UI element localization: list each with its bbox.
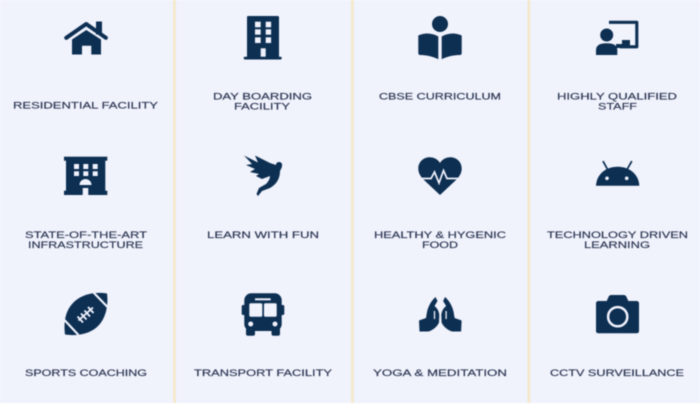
label: cbse curriculum: CBSE CURRICULUM — [379, 90, 501, 102]
label: technology driven learning: TECHNOLOGY DRIVEN — [547, 229, 688, 240]
panel: day boarding facility — [213, 16, 312, 112]
icon: house — [66, 22, 106, 54]
icon: american football — [64, 292, 108, 335]
panel: day boarding facility: FACILITY — [234, 100, 291, 112]
icon: praying hands — [419, 297, 462, 332]
panel: healthy and hygenic food — [374, 157, 506, 250]
label: day boarding facility: DAY BOARDING — [213, 90, 312, 102]
panel: highly qualified staff: STAFF — [598, 100, 637, 112]
icon: camera — [596, 295, 639, 333]
panel: transport facility — [194, 293, 333, 378]
label: cctv surveillance: CCTV SURVEILLANCE — [550, 367, 684, 378]
panel: state-of-the-art infrastructure — [25, 157, 147, 250]
panel: state-of-the-art infrastructure: INFRASTRUCTURE — [28, 239, 143, 250]
panel: learn with fun — [207, 156, 319, 240]
label: sports coaching: SPORTS COACHING — [25, 367, 147, 378]
icon: heart with pulse — [418, 157, 462, 195]
icon: reader with open book — [418, 16, 462, 59]
panel: highly qualified staff — [557, 22, 677, 111]
icon: large building — [64, 157, 107, 195]
icon: winged figure — [244, 156, 282, 196]
panel: technology driven learning — [547, 162, 688, 250]
label: state-of-the-art infrastructure: STATE-OF-THE-ART — [25, 229, 147, 240]
panel: technology driven learning: LEARNING — [584, 239, 650, 250]
panel: cbse curriculum — [379, 16, 501, 102]
label: learn with fun: LEARN WITH FUN — [207, 229, 319, 240]
panel: cctv surveillance — [550, 295, 684, 378]
label: transport facility: TRANSPORT FACILITY — [194, 367, 333, 378]
label: highly qualified staff: HIGHLY QUALIFIED — [557, 90, 677, 102]
icon: building — [244, 16, 282, 60]
panel: residential facility — [13, 22, 159, 110]
panel: healthy and hygenic food: FOOD — [422, 239, 458, 250]
label: residential facility: RESIDENTIAL FACILITY — [13, 100, 159, 110]
panel: sports coaching — [25, 292, 147, 378]
icon: bus — [242, 293, 284, 336]
panel: yoga and meditation — [373, 297, 507, 378]
label: healthy and hygenic food: HEALTHY & HYGENIC — [374, 229, 506, 240]
icon: android head — [596, 162, 639, 186]
icon: teacher at board — [596, 22, 637, 55]
label: yoga and meditation: YOGA & MEDITATION — [373, 367, 507, 378]
